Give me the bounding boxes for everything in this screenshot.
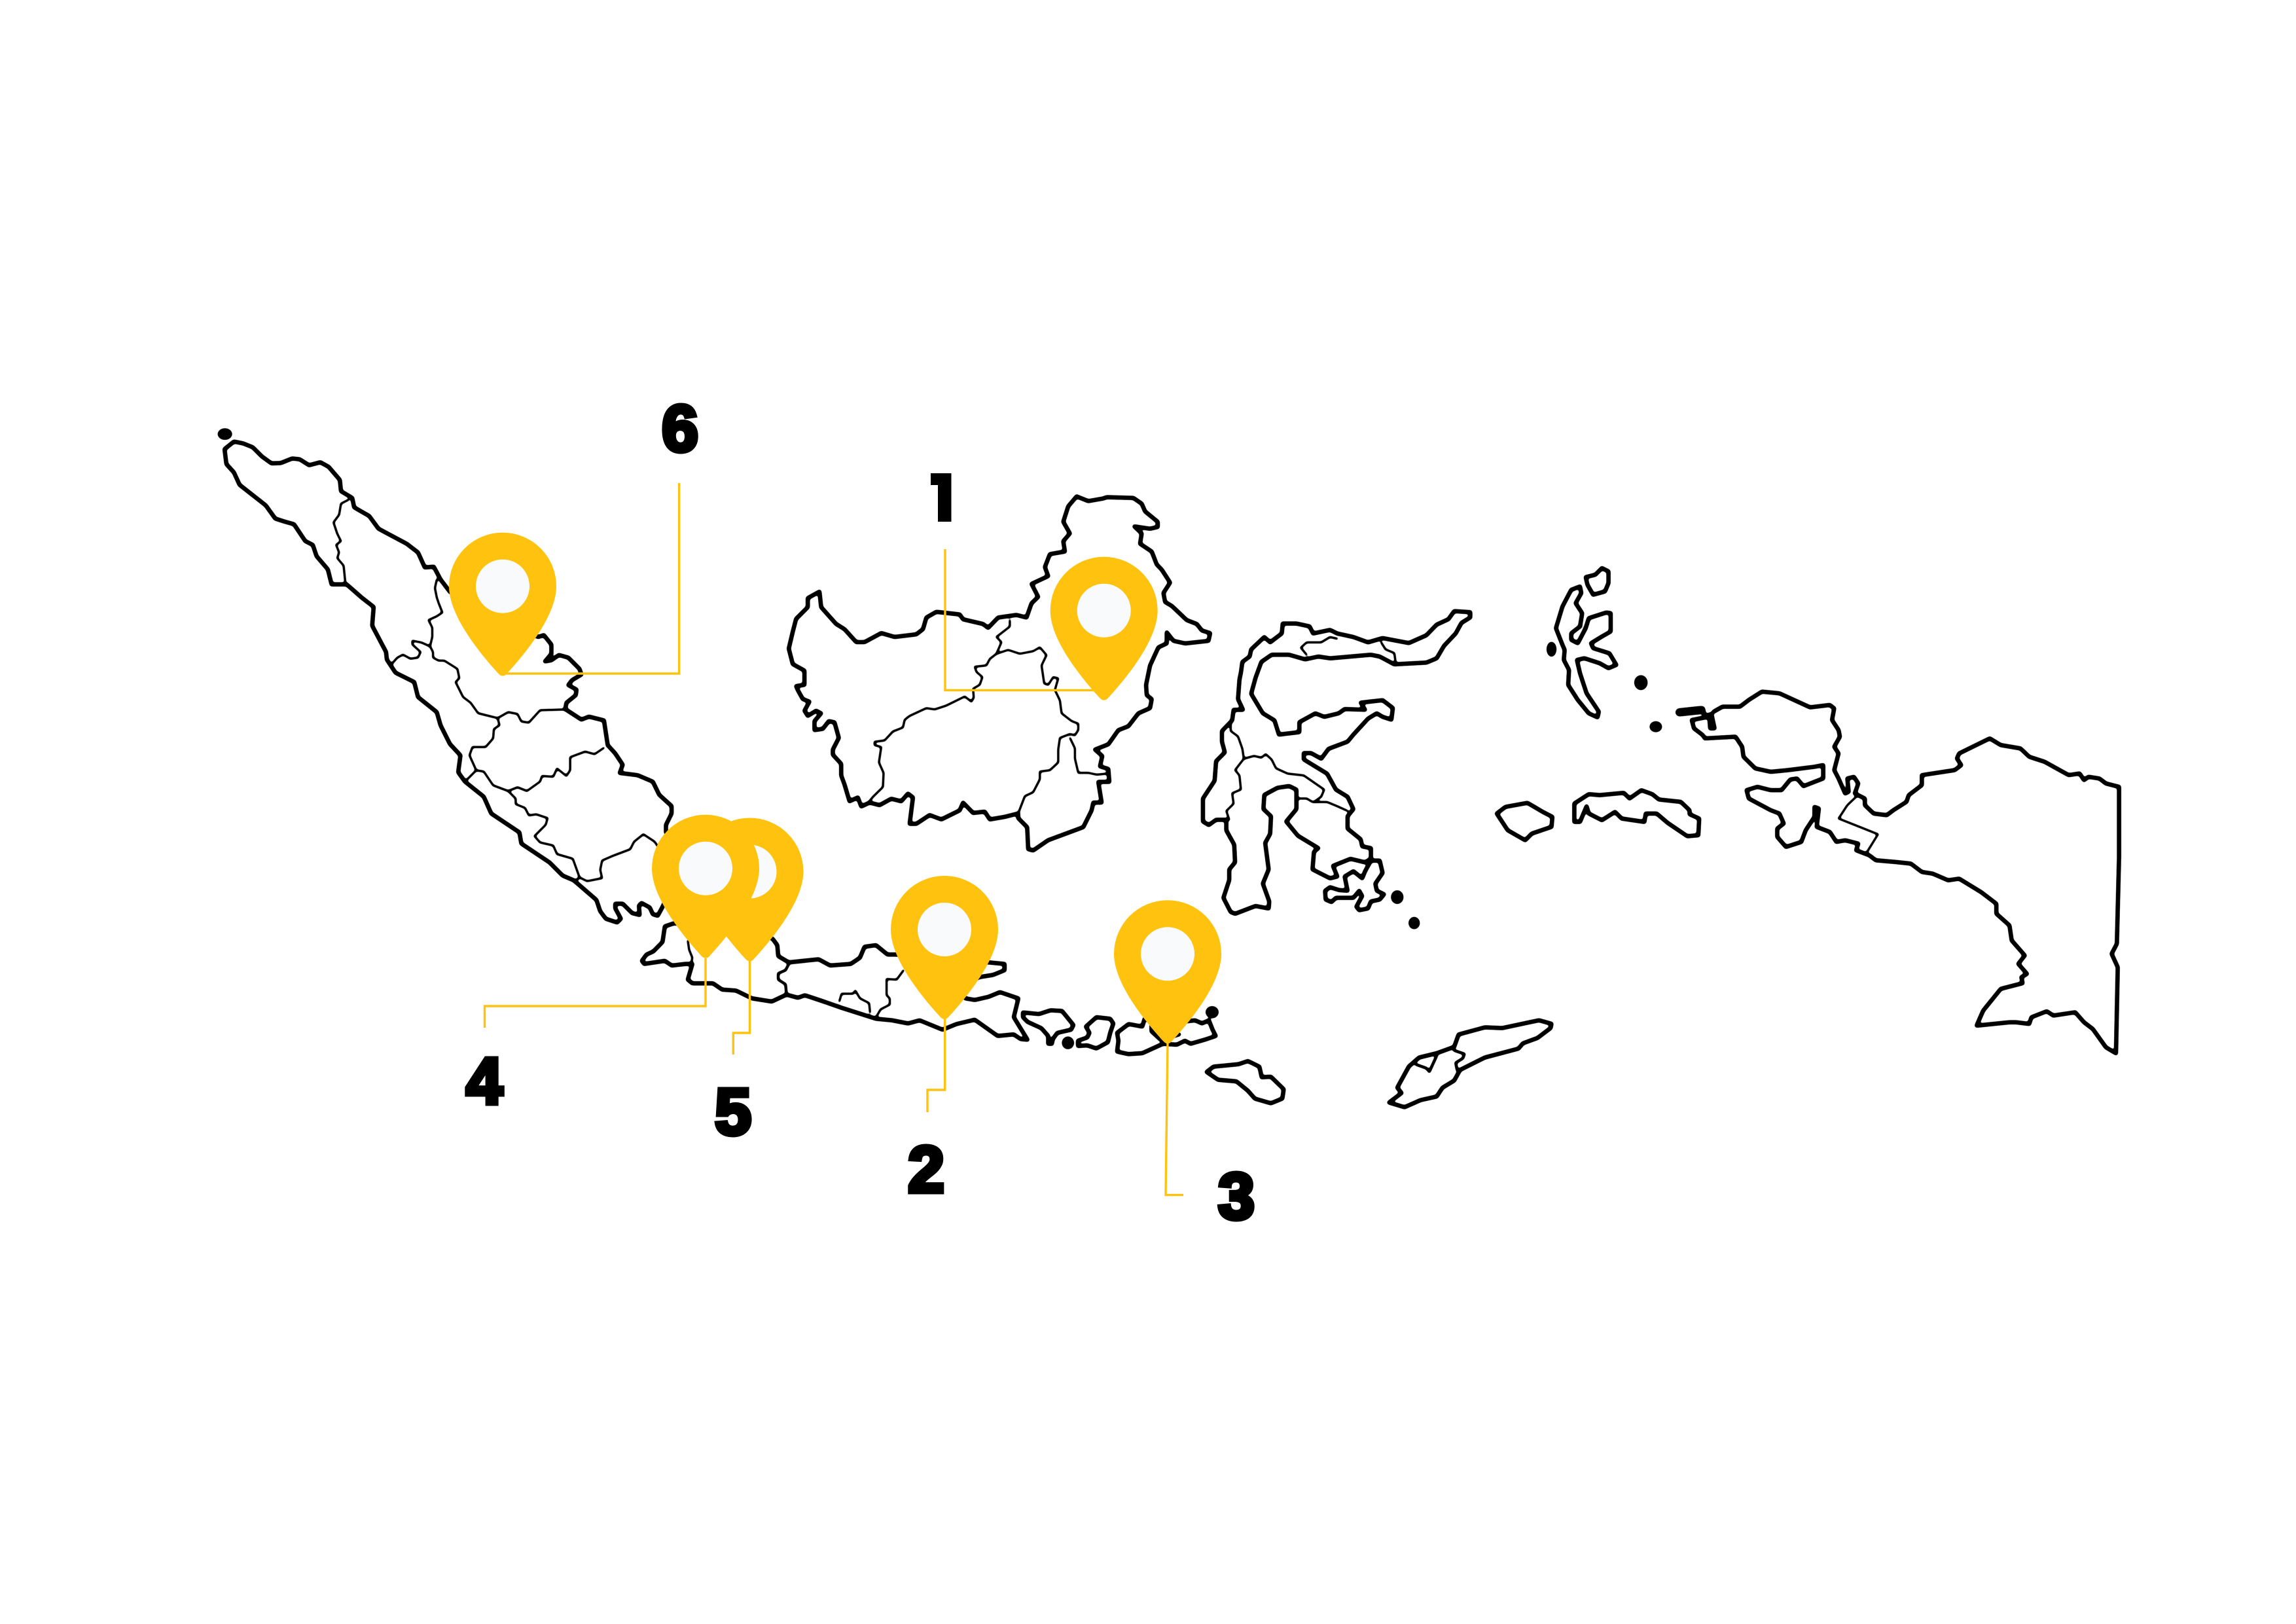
pin 1 bbox=[1050, 557, 1158, 700]
number 5: 5 bbox=[715, 1075, 751, 1149]
islands: Maluku and Papua bbox=[1497, 568, 2119, 1053]
pin 4 bbox=[652, 815, 759, 958]
pin 3 bbox=[1114, 900, 1221, 1043]
leader line 2 bbox=[927, 1019, 945, 1112]
number 3: 3 bbox=[1218, 1160, 1255, 1233]
number 1: 1 bbox=[925, 461, 961, 534]
pin 2 bbox=[891, 876, 998, 1019]
number 6: 6 bbox=[662, 392, 698, 465]
islands: Java, Bali, Lombok, Sumbawa, Sumba bbox=[642, 923, 1283, 1103]
leader line 1 bbox=[945, 549, 1097, 690]
map of Indonesia bbox=[218, 429, 2119, 1107]
leader line 4 bbox=[484, 958, 706, 1028]
island: Sumatra bbox=[218, 429, 685, 922]
number 2: 2 bbox=[908, 1133, 944, 1206]
island: Borneo bbox=[789, 496, 1210, 850]
island: Sulawesi and Timor bbox=[1203, 611, 1551, 1107]
pin 6 bbox=[449, 533, 556, 676]
leader line 5 bbox=[733, 961, 750, 1055]
pin 5 bbox=[696, 818, 804, 961]
leader line 3 bbox=[1166, 1042, 1183, 1195]
leader line 6 bbox=[503, 483, 679, 674]
number 4: 4 bbox=[466, 1045, 503, 1118]
